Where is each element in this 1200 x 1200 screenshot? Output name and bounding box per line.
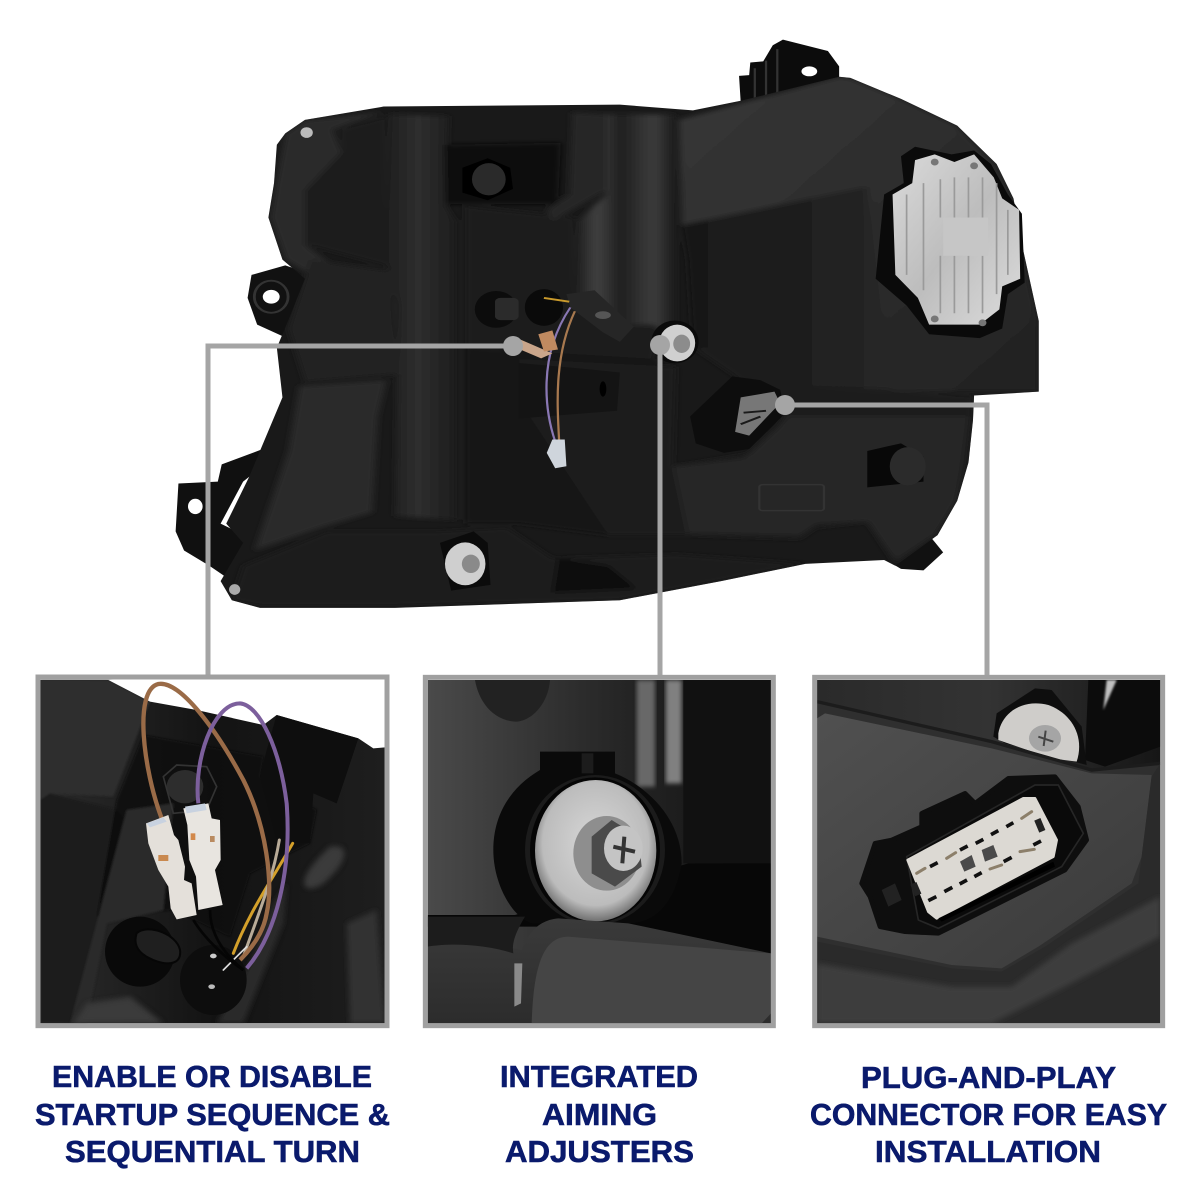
panel: aiming adjuster close-up (425, 677, 773, 1026)
white connector left (146, 815, 197, 919)
left flange screw (300, 127, 313, 138)
caption: startup and sequential turn (35, 1059, 390, 1169)
bottom adjuster bolt (440, 531, 491, 591)
embossed logo (759, 485, 824, 511)
caption: plug-and-play connector: INSTALLATION (875, 1134, 1101, 1169)
bracket tab (519, 363, 620, 418)
caption: startup and sequential turn: STARTUP SEQUENCE & (35, 1097, 390, 1132)
control module metal plate (876, 147, 1025, 338)
raised plastic face (817, 713, 1152, 968)
panel: startup and sequential wiring (38, 677, 387, 1026)
purple wire (198, 703, 288, 968)
right plug post (867, 443, 926, 487)
screw head (573, 816, 643, 891)
panel border (425, 677, 773, 1026)
caption: plug-and-play connector: CONNECTOR FOR EASY (810, 1097, 1167, 1132)
socket and wiring (475, 289, 634, 468)
callout leader line: startup wiring (208, 336, 523, 676)
mounting tab left (248, 265, 319, 336)
pin slots (928, 823, 1041, 901)
white connector right (183, 803, 223, 910)
caption: startup and sequential turn: SEQUENTIAL TURN (65, 1134, 360, 1169)
metal terminals (917, 812, 1034, 873)
callout leader line: aiming adjuster (650, 335, 670, 676)
caption: aiming adjusters: INTEGRATED (500, 1059, 698, 1094)
panel border (815, 677, 1163, 1026)
white background corner (108, 680, 385, 748)
softly shaded background plastic (40, 680, 317, 1023)
caption: plug-and-play connector: PLUG-AND-PLAY (861, 1060, 1116, 1095)
mounting bracket lower left (176, 449, 277, 589)
softly shaded plastic surfaces (232, 77, 1039, 606)
caption: startup and sequential turn: ENABLE OR DISABLE (52, 1059, 372, 1094)
heat sink fins (739, 40, 839, 103)
adjuster housing (493, 752, 682, 923)
adjuster bolt (651, 320, 699, 363)
background bolt (998, 703, 1079, 762)
panel: plug-and-play connector close-up (815, 677, 1163, 1026)
wire bundle (223, 840, 293, 970)
caption: aiming adjusters: ADJUSTERS (505, 1134, 694, 1169)
washer (535, 780, 656, 921)
square cavities (960, 855, 976, 872)
small bracket lower right (893, 535, 943, 570)
socket (105, 917, 175, 987)
caption: aiming adjusters: AIMING (542, 1097, 657, 1132)
caption: plug-and-play connector (810, 1060, 1167, 1169)
connector body (862, 777, 1087, 933)
headlight rear housing photo (176, 40, 1039, 608)
connector white face (908, 798, 1057, 918)
housing silhouette (221, 77, 1039, 608)
terminal lights (208, 984, 215, 989)
caption: aiming adjusters (500, 1059, 698, 1169)
callout leader line: connector (775, 395, 987, 676)
upper cavity with plug (462, 158, 513, 200)
lower ledge (428, 918, 771, 1023)
brown wire (143, 684, 269, 960)
14-pin connector (690, 376, 786, 453)
black connector (260, 715, 358, 843)
panel border (38, 677, 387, 1026)
